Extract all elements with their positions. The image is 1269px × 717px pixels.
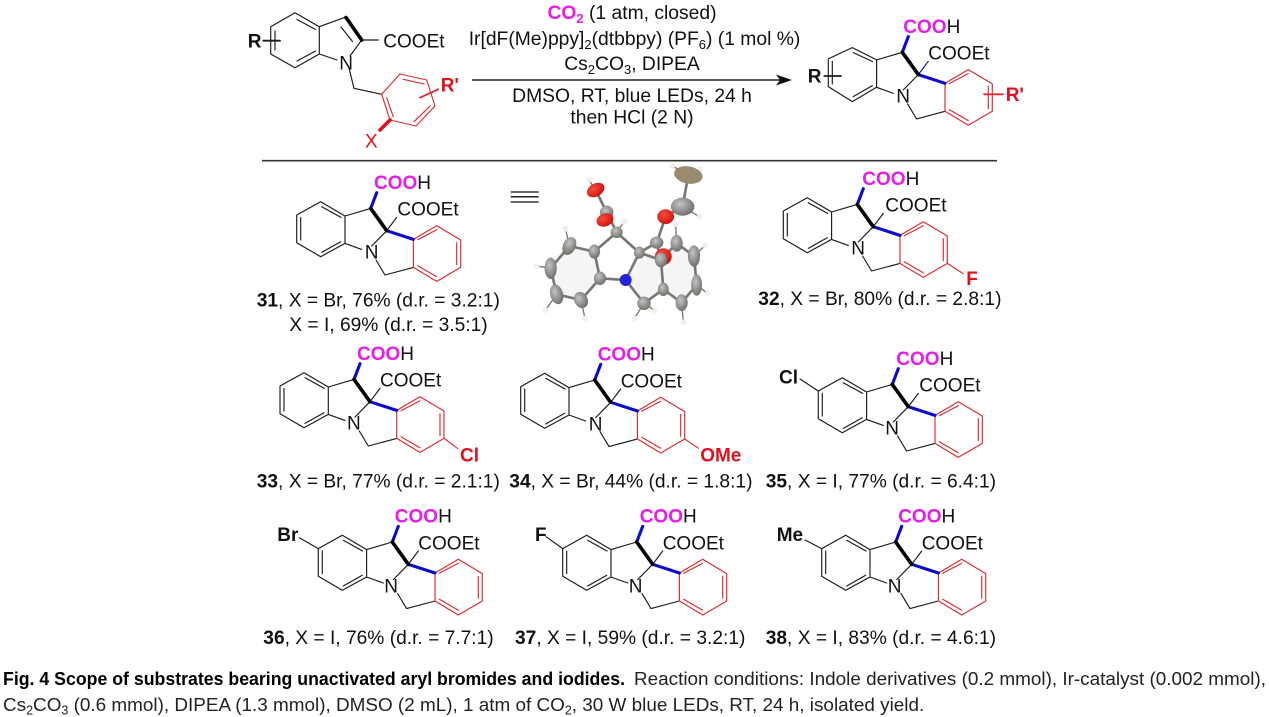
reaction conditions: 2 [588,62,595,77]
compound 35: COOH [896,349,953,370]
label compound 31: X = I, 69% (d.r. = 3.5:1) [289,315,488,336]
equivalence sign [511,192,539,202]
product substituent R [808,67,841,88]
starting material: indole substrate [248,13,459,153]
reaction conditions: CO [547,3,584,26]
compound 37: N [629,576,642,597]
figure caption: (0.6 mmol), DIPEA (1.3 mmol), DMSO (2 mL), 1 atm of CO [68,695,565,716]
label compound 38: 38, X = I, 83% (d.r. = 4.6:1) [766,628,996,649]
figure caption: , 30 W blue LEDs, RT, 24 h, isolated yield. [572,695,924,716]
reaction conditions: 2 [576,11,584,26]
reaction conditions: (dtbbpy) (PF [592,29,699,50]
compound 33: COOH [357,344,414,365]
compound 36: N [384,576,398,597]
reaction conditions: , DIPEA [631,54,700,75]
reaction conditions [469,3,800,128]
reaction conditions: 2 [584,37,592,52]
product substituent R prime [984,85,1024,106]
compound 32: COOH [862,169,919,190]
compound 34: OMe [700,446,741,467]
figure caption: Fig. 4 Scope of substrates bearing unactivated aryl bromides and iodides. [3,668,625,689]
reaction conditions: Ir[dF(Me)ppy] [469,29,584,50]
compound 33: N [347,414,361,435]
X-ray crystal structure [534,163,710,325]
reaction conditions: 6 [699,37,706,52]
compound 32: N [851,239,865,260]
compound 37: COOEt [663,533,725,554]
compound 31: COOH [374,173,431,194]
product: general structure: COOEt [928,44,990,65]
compound 34: COOEt [621,371,683,392]
reaction conditions: 3 [624,62,631,77]
compound 38: COOEt [922,533,984,554]
starting material: indole substrate: COOEt [383,32,445,53]
compound 36: COOEt [418,533,480,554]
compound 33 [280,344,479,467]
compound 34: N [589,414,602,435]
starting material: indole substrate: X [365,132,378,153]
figure caption: Reaction conditions: Indole derivatives (0.2 mmol), Ir-catalyst (0.002 mmol), [634,668,1266,689]
compound 31: COOEt [397,200,459,221]
label compound 31 [257,291,500,336]
figure caption: CO [33,695,61,716]
compound 35: N [885,419,899,440]
compound 35 [779,349,982,457]
label compound 34: 34, X = Br, 44% (d.r. = 1.8:1) [509,472,752,493]
compound 35: Cl [779,367,798,388]
reaction conditions: (1 atm, closed) [584,3,717,24]
compound 36 [277,507,482,615]
compound 36: Br [277,525,299,546]
figure caption [3,668,1266,717]
compound 34 [521,345,741,467]
label compound 32: 32, X = Br, 80% (d.r. = 2.8:1) [758,289,1001,310]
compound 31 [297,173,461,281]
compound 37 [535,507,727,615]
compound 33: Cl [460,446,479,467]
compound 34: COOH [598,345,655,366]
compound 32: COOEt [885,196,947,217]
starting material: indole substrate: N [339,53,353,74]
label compound 37: 37, X = I, 59% (d.r. = 3.2:1) [515,628,745,649]
compound 32: F [966,269,978,290]
reaction conditions: CO [595,54,624,75]
label compound 35: 35, X = I, 77% (d.r. = 6.4:1) [766,472,996,493]
product: general structure: N [896,87,910,108]
compound 38: N [888,576,901,597]
compound 33: COOEt [380,371,442,392]
product substituent R: R [808,67,822,88]
starting material: indole substrate: R' [441,76,459,97]
label compound 33: 33, X = Br, 77% (d.r. = 2.1:1) [257,472,500,493]
starting material: indole substrate: R [248,32,262,53]
compound 32 [783,169,978,290]
reaction conditions: DMSO, RT, blue LEDs, 24 h [512,86,752,107]
compound 37: F [535,525,547,546]
compound 36: COOH [395,507,452,528]
product: general structure [828,17,992,125]
reaction conditions: ) (1 mol %) [706,29,800,50]
compound 38: COOH [898,507,955,528]
product: general structure: COOH [903,17,960,38]
reaction conditions: Cs [564,54,588,75]
figure caption: Cs [3,695,26,716]
compound 35: COOEt [919,376,981,397]
label compound 36: 36, X = I, 76% (d.r. = 7.7:1) [263,628,494,649]
product substituent R prime: R' [1006,85,1024,106]
compound 37: COOH [640,507,697,528]
compound 38: Me [777,525,803,546]
compound 38 [777,507,986,615]
compound 31: N [365,243,378,264]
label compound 31: 31, X = Br, 76% (d.r. = 3.2:1) [257,291,500,312]
divider rule [262,160,997,162]
arrow [472,74,792,86]
reaction conditions: then HCl (2 N) [570,108,694,128]
